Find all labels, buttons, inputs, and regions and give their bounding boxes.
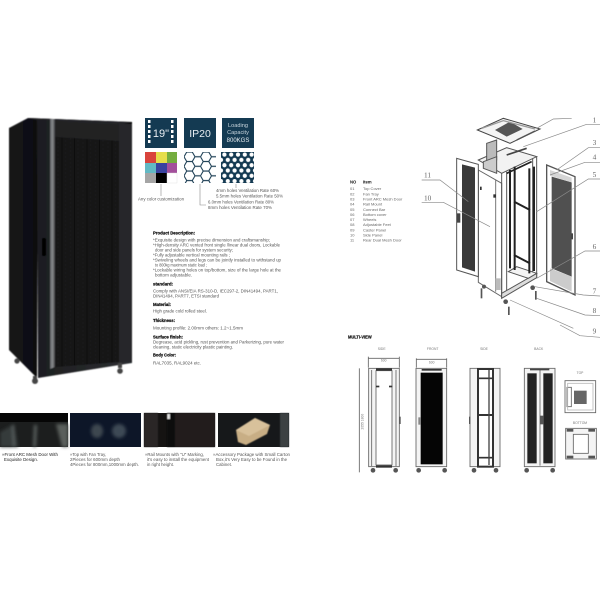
callout numbers: [424, 115, 597, 315]
callout numbers: 5: [593, 170, 597, 179]
spec badge: IP20: [184, 118, 216, 148]
text block: thickness: Thickness:: [153, 318, 175, 324]
view: side, open: 2055 1800: [360, 414, 364, 430]
text block: product description: *Exquisite design with precise dimension and craftsmanship;: [153, 238, 270, 244]
spec badge: loading capacity: 800KGS: [227, 138, 249, 144]
view: top: [565, 371, 596, 413]
callout numbers: 4: [593, 153, 597, 162]
text block: product description: [153, 230, 281, 278]
callout: round hole ventilation rates: 5.5mm holes Ventilation Rate 50%: [216, 194, 283, 198]
parts legend table: Connect Bar: [363, 207, 386, 212]
view: side, open: 600: [381, 359, 387, 363]
callout: colour customization: [138, 184, 184, 202]
parts legend table: Wheels: [363, 217, 376, 222]
photo: mesh door detail: [0, 413, 68, 447]
frame with rails: [478, 140, 537, 298]
product photo: black cabinet: [9, 118, 132, 384]
parts legend table: 04: [350, 202, 355, 207]
text block: body color: [153, 352, 201, 366]
text block: surface finish: Surface finish:: [153, 334, 183, 340]
text block: standard: [153, 282, 278, 300]
text block: product description: to 800kg maximum static load ;: [155, 262, 207, 268]
caption: mesh door: Exquisite Design.: [4, 457, 38, 462]
callout leader lines: [422, 118, 600, 328]
text block: product description: *Lockable wiring holes on top/bottom, size of the large hole at the: [153, 268, 281, 274]
text block: product description: *Swiveling wheels and legs can be jointly installed to withstand up: [153, 258, 281, 264]
text block: product description: door and side panels for system security;: [155, 248, 233, 254]
side panel: [478, 170, 502, 297]
view: side, frame: SIDE: [480, 347, 489, 351]
parts legend table: 11: [350, 238, 355, 242]
text block: product description: *Fully adjustable vertical mounting rails ;: [153, 252, 230, 258]
caption: accessory package: »Accessory Package with Small Carton: [213, 452, 290, 457]
photo: rail mounts: [144, 413, 215, 447]
parts legend table: Fan Tray: [363, 191, 379, 196]
caption: mesh door: [2, 452, 58, 462]
parts legend table: 03: [350, 197, 355, 202]
parts legend table: Side Panel: [363, 232, 382, 238]
view: front: FRONT: [427, 347, 438, 351]
view: side, open: [359, 347, 401, 473]
text block: material: Material:: [153, 302, 171, 308]
parts legend table: Rear Dual Mesh Door: [363, 238, 402, 242]
multi-view drawings: [348, 325, 600, 473]
text block: body color: Body Color:: [153, 352, 176, 358]
text block: body color: RAL7035, RAL9024 etc.: [153, 360, 201, 366]
text block: material: High grade cold rolled steel.: [153, 308, 207, 314]
callout: hexagon ventilation rates: 6.0mm holes Ventilation Rate 80%: [208, 200, 274, 204]
parts legend table: 07: [350, 217, 355, 222]
caption: fan tray: 2Pieces for 600mm depth: [70, 457, 120, 462]
parts legend table: NO: [350, 180, 357, 184]
view: back: [524, 347, 555, 473]
caption: rail mounts: in right height.: [147, 462, 174, 467]
rear door left: [457, 158, 478, 277]
view: bottom: BOTTOM: [573, 421, 587, 425]
parts legend table: [350, 180, 403, 242]
text block: thickness: [153, 318, 243, 332]
view: bottom: [566, 421, 596, 459]
parts legend table: Top Cover: [363, 186, 382, 191]
view: top: TOP: [577, 371, 584, 375]
caption: accessory package: [213, 452, 290, 467]
callout number 9: 9: [593, 326, 597, 335]
view: front: 600: [429, 361, 435, 365]
parts legend table: 01: [350, 186, 355, 191]
view: side, frame: [469, 347, 500, 473]
callout numbers: 1: [593, 115, 597, 124]
text block: material: [153, 302, 207, 314]
callout number 9: [560, 325, 600, 337]
parts legend table: 06: [350, 212, 355, 217]
top cover: [477, 118, 540, 143]
callout numbers: 6: [593, 242, 597, 251]
text block: surface finish: Degrease, acid pickling, rust prevention and Parkerizing, pure water: [153, 340, 284, 346]
colour swatch grid: [145, 152, 177, 183]
view: back: BACK: [534, 347, 544, 351]
parts legend table: Caster Panel: [363, 227, 386, 232]
wheels and feet: [481, 285, 537, 315]
spec badge: loading capacity: Capacity: [227, 130, 249, 136]
parts legend table: Adjustable Feet: [363, 222, 392, 227]
text block: product description: Product Description:: [153, 230, 195, 236]
caption: accessory package: Cabinet.: [216, 462, 232, 467]
photo: accessory carton: [218, 413, 289, 447]
hexagon mesh swatch: [184, 152, 216, 183]
parts legend table: 08: [350, 222, 355, 227]
text block: thickness: Mounting profile: 2.00mm others: 1.2~1.5mm: [153, 326, 243, 332]
caption: fan tray: »Top with Fan Tray,: [70, 452, 106, 457]
text block: product description: *High-density ARC vented front single /linear dual doors, Lockable: [153, 242, 280, 248]
spec badge: 19 inch: [145, 118, 177, 148]
spec badge: loading capacity: Loading: [228, 123, 248, 129]
round hole mesh swatch: [221, 152, 254, 183]
callout numbers: 11: [424, 170, 431, 179]
caption: rail mounts: it's easy to install the equipment: [147, 457, 210, 462]
text block: standard: DIN41494, PART7, ETSI standard: [153, 294, 219, 300]
parts legend table: Item: [363, 180, 372, 184]
parts legend table: Bottom cover: [363, 212, 387, 217]
callout: round hole ventilation rates: [216, 184, 283, 198]
text block: product description: bottom adjustable.: [155, 272, 192, 278]
heading: multi-view: MULTI-VIEW: [348, 334, 373, 339]
caption: fan tray: 4Pieces for 800mm,1000mm depth.: [70, 462, 139, 467]
caption: accessory package: Box,it's Very Easy to be Found in the: [216, 457, 287, 462]
view: front: [416, 347, 447, 473]
parts legend table: 05: [350, 207, 355, 212]
caption: rail mounts: [145, 452, 210, 467]
caption: rail mounts: »Rail Mounts with "U" Marking,: [145, 452, 204, 457]
spec badge: loading capacity: [222, 118, 254, 148]
photo: fan tray: [70, 413, 141, 447]
callout numbers: 7: [593, 287, 597, 296]
callout: round hole ventilation rates: 4mm holes Ventilation Rate 60%: [216, 188, 279, 193]
parts legend table: 02: [350, 191, 355, 196]
callout: hexagon ventilation rates: 8mm holes Ventilation Rate 70%: [208, 205, 272, 210]
callout numbers: 3: [593, 138, 597, 147]
parts legend table: 09: [350, 227, 355, 232]
icon: wheels: [14, 358, 123, 384]
callout numbers: 10: [424, 193, 432, 202]
parts legend table: Rail Mount: [363, 202, 383, 207]
callout numbers: 8: [593, 306, 597, 315]
text block: standard: standard:: [153, 282, 173, 288]
text block: surface finish: cleaning, static electricity plastic painting.: [153, 344, 233, 350]
spec badge: IP20: IP20: [189, 128, 211, 140]
parts legend table: 10: [350, 232, 355, 238]
view: side, open: SIDE: [378, 347, 386, 351]
caption: mesh door: »Front ARC Mesh Door With: [2, 452, 58, 457]
front door right: [547, 165, 575, 295]
text block: surface finish: [153, 334, 284, 350]
parts legend table: Front ARC Mesh Door: [363, 197, 403, 202]
callout: colour customization: Any color customization: [138, 196, 184, 202]
caption: fan tray: [70, 452, 139, 467]
callout: hexagon ventilation rates: [200, 184, 274, 210]
text block: standard: Comply with ANSI/EIA RS-310-D, IEC297-2, DIN41494, PART1,: [153, 288, 278, 294]
spec badge: 19 inch: 19": [153, 128, 169, 140]
exploded diagram of cabinet: [422, 115, 600, 328]
